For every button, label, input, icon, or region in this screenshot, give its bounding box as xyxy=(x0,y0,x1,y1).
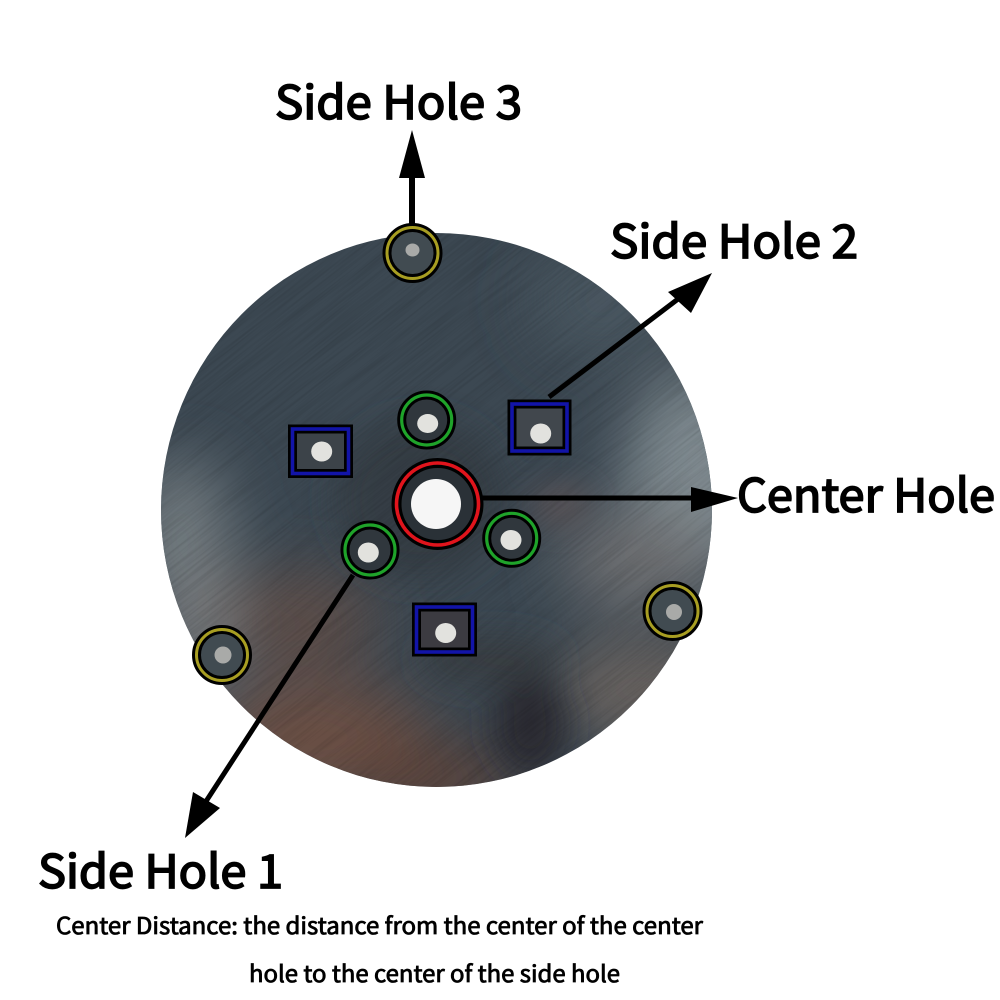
arrow: side hole 3 xyxy=(399,130,425,226)
caption: hole to the center of the side hole xyxy=(249,955,620,989)
label: side hole 3: Side Hole 3 xyxy=(275,67,522,133)
caption: Center Distance: the distance from the center of the center xyxy=(56,907,703,941)
arrow: side hole 2 xyxy=(549,273,712,397)
side holes 2: blue squares xyxy=(292,404,567,652)
side holes 1: green circles xyxy=(345,395,537,575)
metal plate xyxy=(161,233,712,787)
label: center hole: Center Hole xyxy=(737,460,995,526)
caption xyxy=(56,907,703,989)
arrow: center hole xyxy=(482,487,738,512)
label: side hole 1: Side Hole 1 xyxy=(38,836,283,902)
label: side hole 2: Side Hole 2 xyxy=(610,206,858,272)
side holes 3: yellow circles xyxy=(196,228,698,680)
center hole xyxy=(396,463,478,545)
arrow: side hole 1 xyxy=(185,575,353,838)
